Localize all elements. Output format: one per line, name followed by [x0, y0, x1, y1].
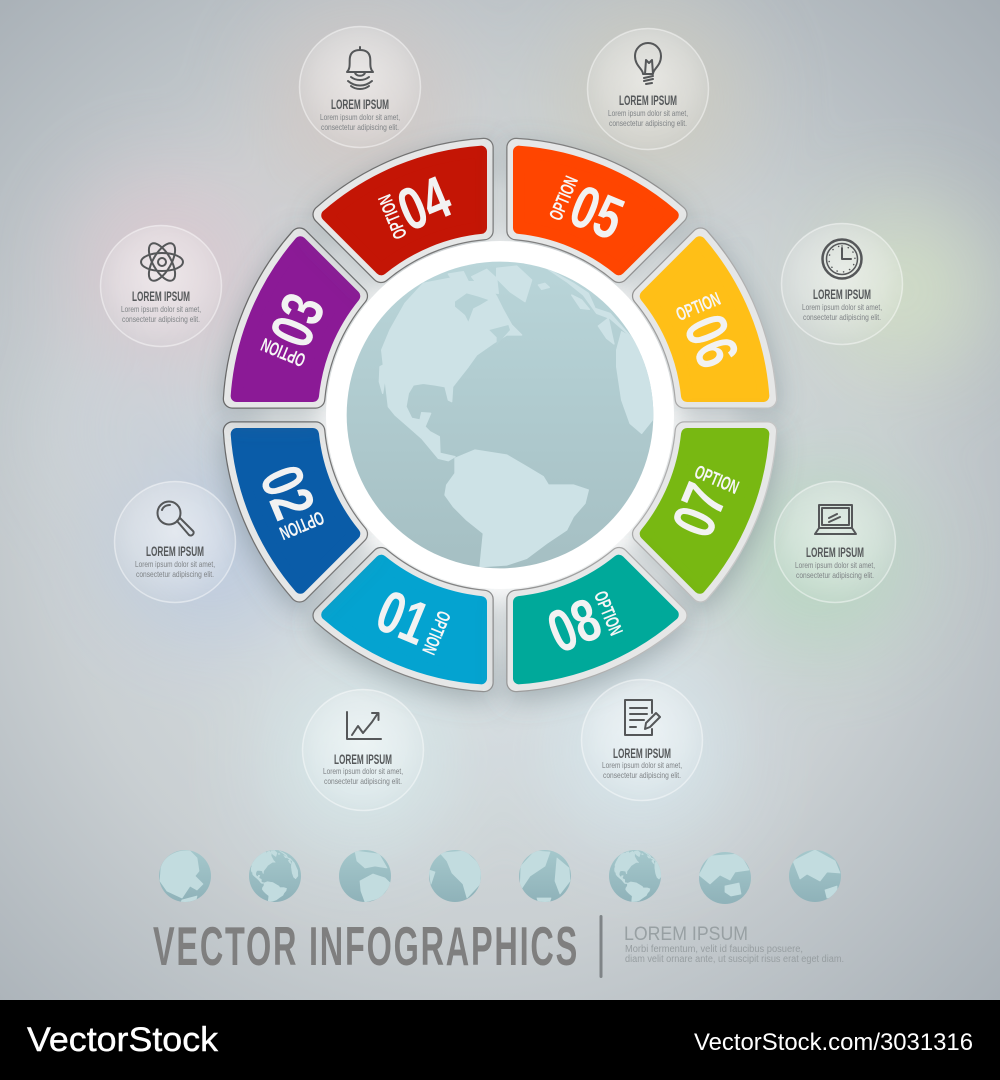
footer bar	[0, 1000, 1000, 1080]
bubble: bell	[300, 26, 420, 148]
subtitle block: LOREM IPSUM	[624, 924, 748, 945]
bubble: bell: consectetur adipiscing elit.	[321, 122, 399, 132]
segment 02: OPTION	[276, 506, 327, 543]
segment 07	[629, 402, 781, 598]
white disc around globe	[326, 241, 674, 589]
icon: bulb	[635, 43, 661, 84]
white ring glow behind segments	[212, 127, 788, 703]
globe	[347, 262, 655, 568]
footer bar: VectorStock	[27, 1021, 219, 1059]
segment 02: 02	[247, 456, 328, 528]
small globe 8	[789, 850, 841, 902]
segment ring	[219, 134, 781, 696]
segment 08	[487, 544, 683, 696]
bubble: chart: LOREM IPSUM	[334, 752, 392, 767]
segment 07: 07	[659, 474, 740, 546]
bubble: laptop: consectetur adipiscing elit.	[796, 570, 874, 580]
segment 04: OPTION	[375, 191, 412, 242]
icon: magnifier	[158, 502, 194, 536]
small globes row	[159, 850, 841, 904]
segment 01: 01	[367, 577, 438, 658]
bubble: magnifier: LOREM IPSUM	[146, 544, 204, 559]
bubble: light bulb: consectetur adipiscing elit.	[609, 118, 687, 128]
segment 06: OPTION	[673, 289, 724, 326]
segment 03	[219, 232, 371, 428]
small globe 7	[699, 852, 751, 904]
divider	[600, 915, 602, 978]
segment 07: OPTION	[691, 462, 742, 499]
bubble: atom: Lorem ipsum dolor sit amet,	[121, 304, 201, 314]
icon: atom	[141, 239, 183, 285]
bubble: document	[582, 680, 702, 800]
bubble: chart	[302, 690, 424, 810]
icon: bell	[347, 47, 373, 89]
bubble: atom: consectetur adipiscing elit.	[122, 314, 200, 324]
subtitle block	[624, 924, 844, 965]
segment 05	[487, 134, 683, 286]
bubble: magnifier: consectetur adipiscing elit.	[136, 569, 214, 579]
bubble: document: Lorem ipsum dolor sit amet,	[602, 760, 682, 770]
small globe 2	[249, 850, 301, 902]
bubble: document: consectetur adipiscing elit.	[603, 770, 681, 780]
icon: line chart	[347, 712, 381, 739]
bubble: bell: LOREM IPSUM	[331, 97, 389, 112]
segment 08: OPTION	[589, 588, 626, 639]
bubble: magnifier: Lorem ipsum dolor sit amet,	[135, 559, 215, 569]
bubble: light bulb	[588, 28, 708, 150]
title: VECTOR INFOGRAPHICS	[153, 915, 579, 977]
segment 02	[219, 402, 371, 598]
bubble: document: LOREM IPSUM	[613, 746, 671, 761]
segment 01: OPTION	[417, 608, 454, 657]
icon: document and pencil	[625, 700, 660, 735]
segment 04: 04	[388, 163, 461, 244]
bubble: clock: Lorem ipsum dolor sit amet,	[802, 302, 882, 312]
segment 08: 08	[538, 585, 610, 666]
bubble: atom	[100, 226, 222, 346]
bubble: bell: Lorem ipsum dolor sit amet,	[320, 112, 400, 122]
bubble: light bulb: Lorem ipsum dolor sit amet,	[608, 108, 688, 118]
bubble: chart: consectetur adipiscing elit.	[324, 776, 402, 786]
segment 04	[317, 134, 513, 286]
bubble: clock: LOREM IPSUM	[813, 287, 871, 302]
segment 05: OPTION	[546, 173, 583, 224]
segment 05: 05	[561, 172, 633, 253]
segment 03: 03	[257, 284, 338, 356]
segment 01	[317, 544, 513, 696]
small globe 3	[339, 850, 391, 902]
footer bar: VectorStock.com/3031316	[694, 1029, 973, 1056]
small globe 1	[159, 850, 211, 904]
bubble: laptop	[774, 482, 896, 602]
segment 03: OPTION	[258, 333, 309, 370]
small globe 6	[609, 850, 661, 902]
bubble: atom: LOREM IPSUM	[132, 289, 190, 304]
icon: clock	[822, 240, 862, 278]
segment 06: 06	[671, 305, 752, 377]
small globe 5	[519, 850, 571, 904]
bubble: clock	[782, 224, 902, 344]
bubble: laptop: LOREM IPSUM	[806, 545, 864, 560]
icon: laptop	[815, 505, 856, 534]
subtitle block: diam velit ornare ante, ut suscipit risus erat eget diam.	[625, 954, 844, 965]
subtitle block: Morbi fermentum, velit id faucibus posuere,	[625, 944, 803, 955]
bubble: clock: consectetur adipiscing elit.	[803, 312, 881, 322]
bubble: light bulb: LOREM IPSUM	[619, 93, 677, 108]
small globe 4	[429, 850, 481, 902]
bubble: laptop: Lorem ipsum dolor sit amet,	[795, 560, 875, 570]
bubble: chart: Lorem ipsum dolor sit amet,	[323, 766, 403, 776]
bubble: magnifier	[114, 482, 236, 602]
segment 06	[629, 232, 781, 428]
